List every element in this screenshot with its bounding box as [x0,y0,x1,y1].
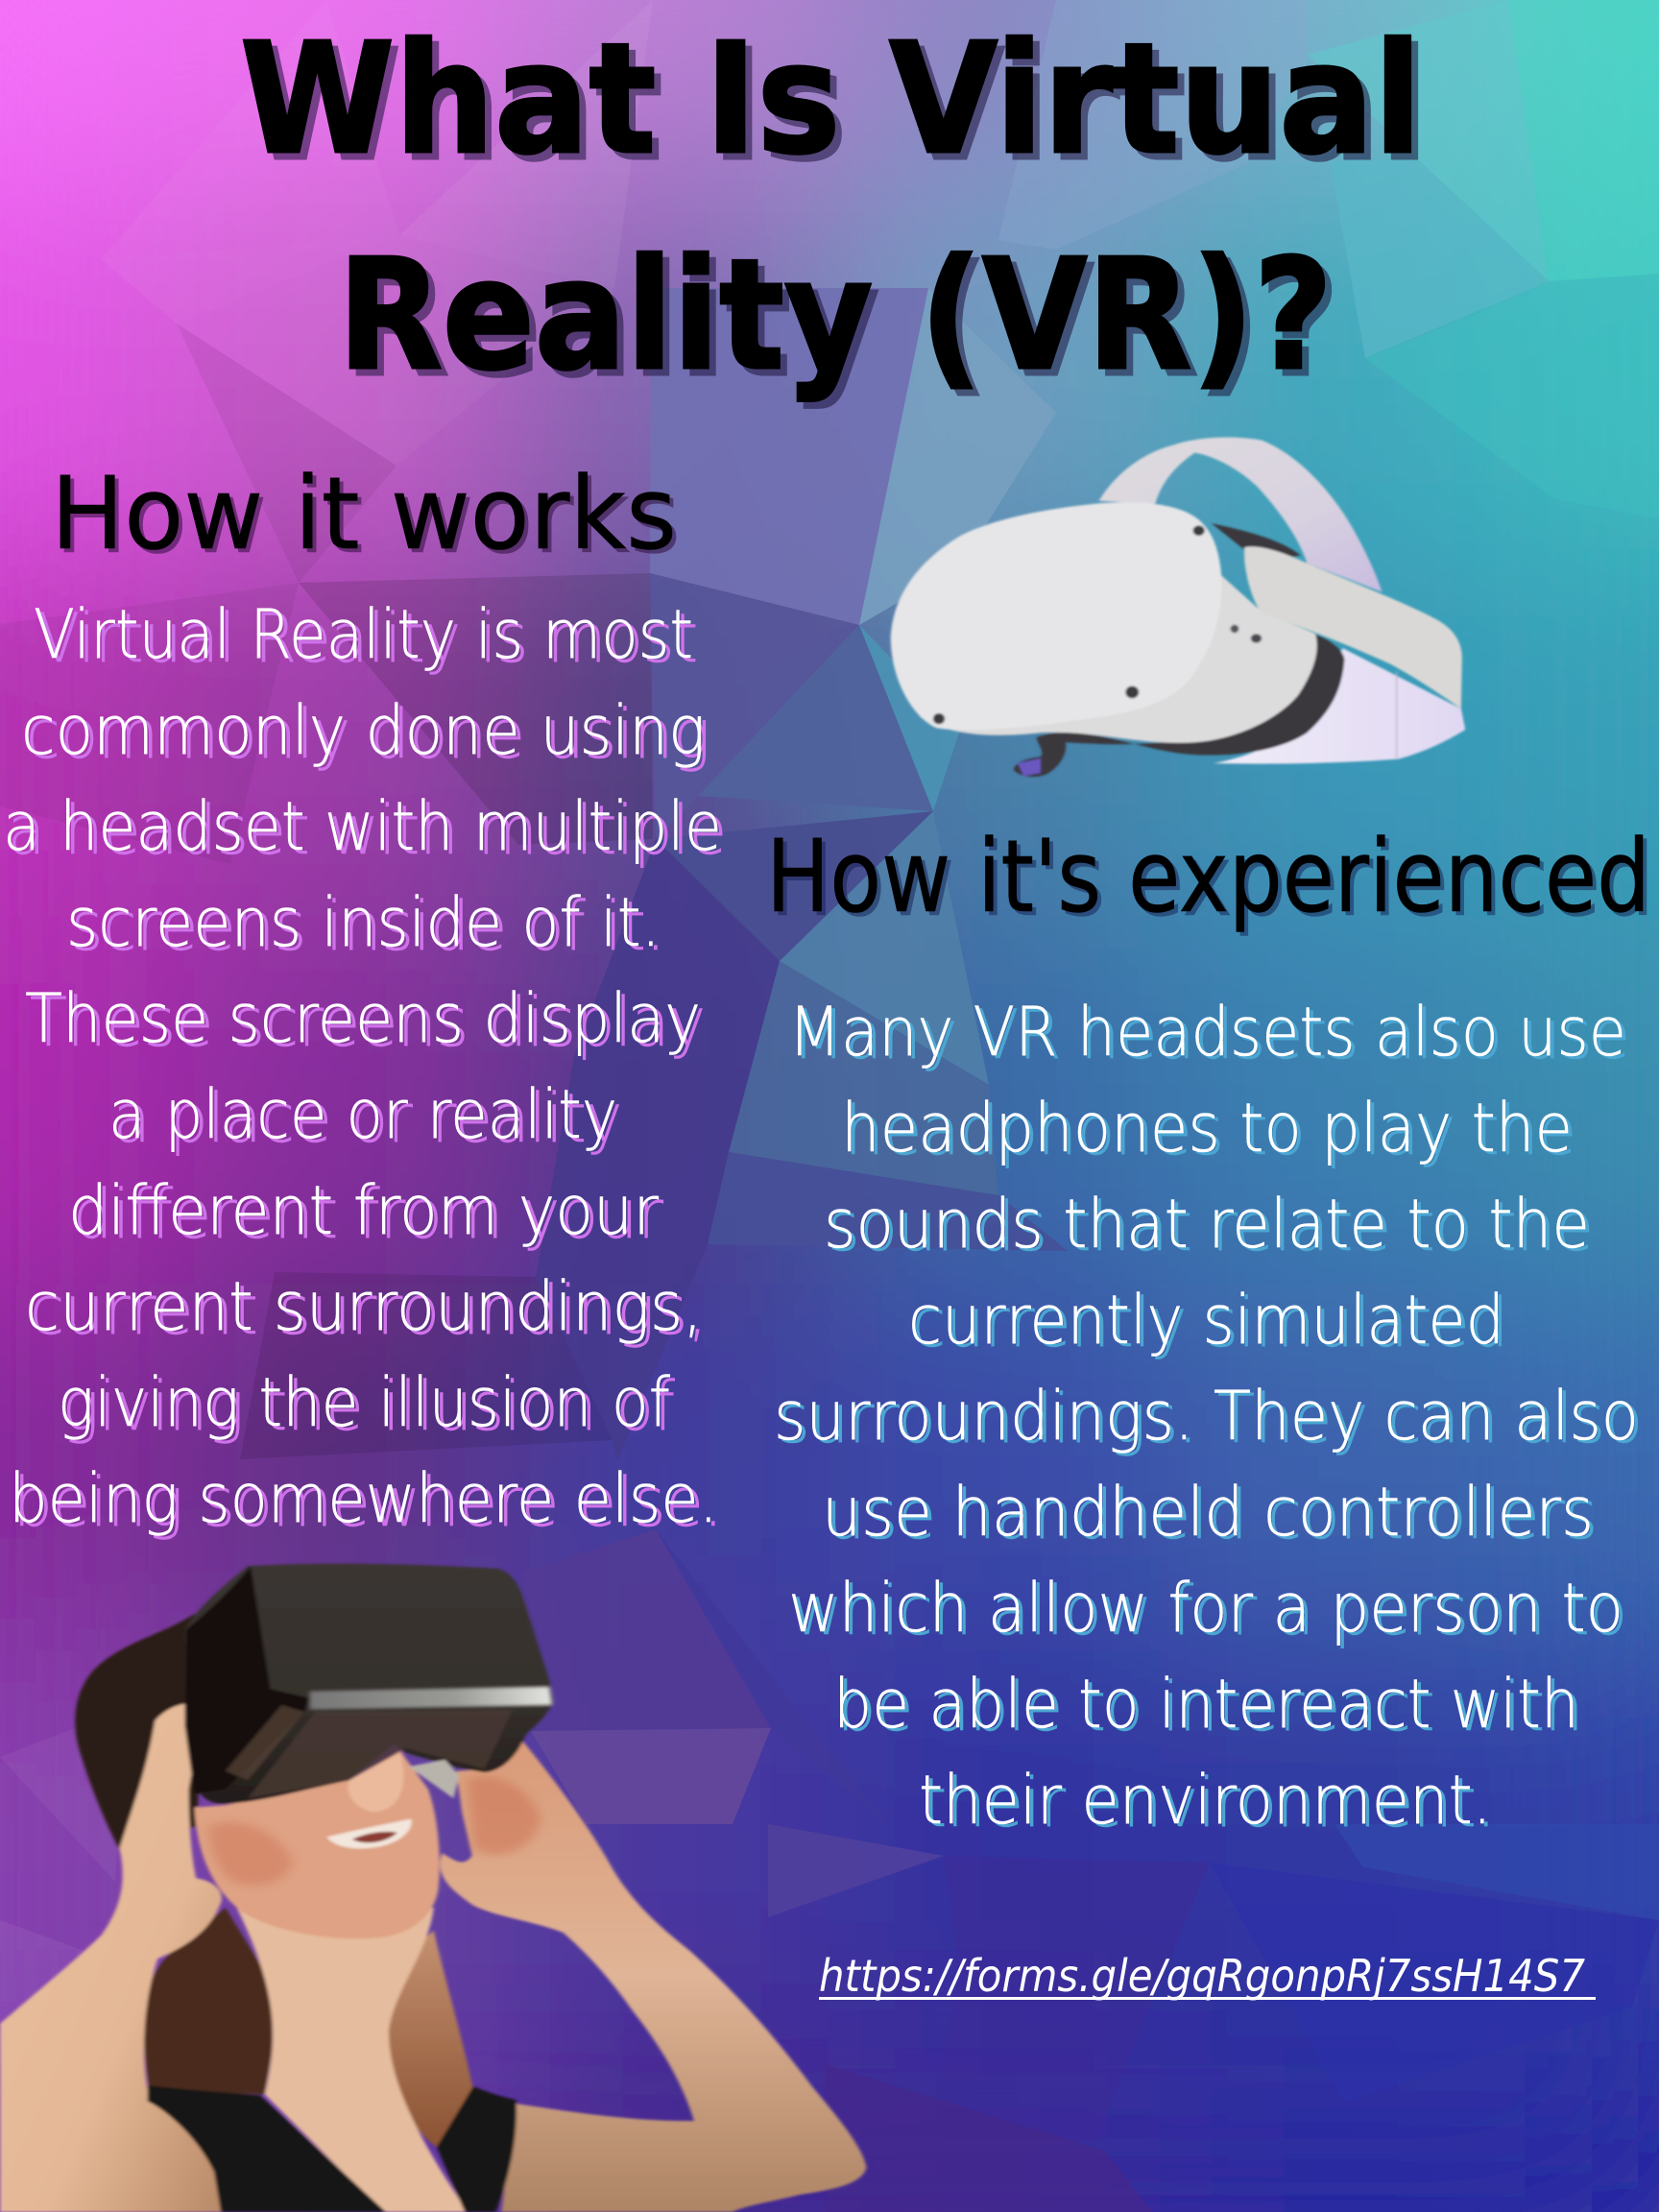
text block: how it works body: different from your [68,1171,659,1250]
right arm and hand [440,1739,866,2212]
text block: how it works body: being somewhere else. [9,1459,718,1538]
image: woman wearing VR headset [0,1564,866,2212]
text block: how it works body: commonly done using [21,691,706,770]
link: https://forms.gle/gqRgonpRj7ssH14S7 [819,1950,1585,2002]
left arm and hand [0,1703,222,2212]
face [194,1750,440,1938]
hair back [75,1614,203,1853]
text block: how it works body [3,595,722,1538]
text block: how it works body: Virtual Reality is most [34,595,693,674]
text block: how it's experienced body: their environment. [919,1761,1492,1839]
text block: how it's experienced body: headphones to play the [841,1089,1573,1167]
text block: how it's experienced body: sounds that relate to the [824,1185,1590,1263]
text block: how it works body: a headset with multiple [3,787,722,866]
facets: centre purple and blue [523,288,1068,1824]
text block: how it works body: a place or reality [108,1075,617,1154]
facets: top right teal [998,0,1659,518]
text block: how it works body: screens inside of it. [66,883,661,962]
neck and chest [236,1908,468,2212]
facets: bottom right blue [768,1824,1659,2212]
text block: how it's experienced body: currently simulated [908,1281,1504,1359]
title: Reality (VR)? [338,227,1333,404]
text block: how it's experienced body [774,993,1639,1839]
title: What Is Virtual [240,11,1422,188]
headset [184,1564,553,1804]
text block: how it's experienced body: be able to intereact with [833,1665,1579,1743]
mouth [326,1819,412,1848]
heading: how it works: How it works [51,455,677,572]
text block: how it works body: giving the illusion of [58,1363,670,1442]
text block: how it works body: These screens display [25,979,701,1058]
text block: how it works body: current surroundings, [25,1267,703,1346]
long hair [144,1908,473,2150]
black top [148,2085,517,2212]
text block: how it's experienced body: use handheld controllers [822,1473,1594,1551]
title [240,11,1422,404]
image: white VR headset [891,438,1465,777]
